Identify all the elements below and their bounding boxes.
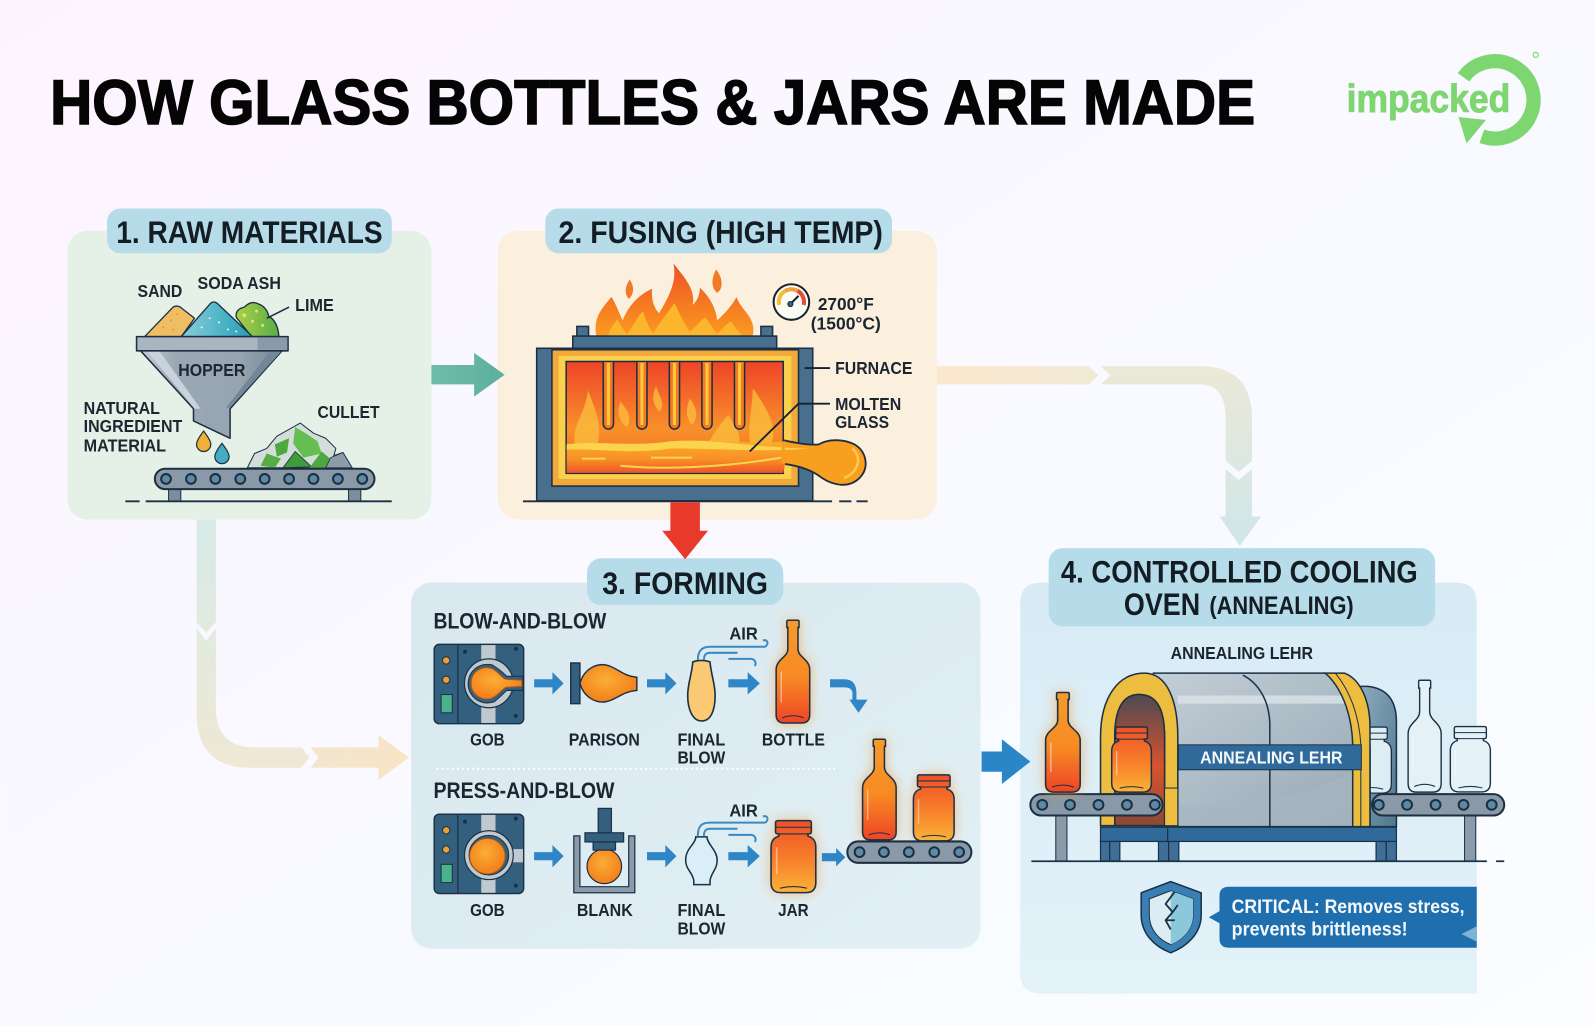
- labels: (1500°C): [811, 313, 881, 333]
- ground line: [523, 500, 868, 502]
- icon: blank press: [574, 808, 635, 893]
- arrow: fusing to forming: [662, 502, 708, 559]
- arrow: forming to cooling: [982, 739, 1030, 784]
- electrodes: [603, 362, 745, 429]
- icon: parison: [571, 663, 637, 704]
- heading: controlled cooling oven: [1061, 554, 1418, 622]
- clear jar behind lehr: [1351, 727, 1391, 793]
- callout: critical: [1209, 887, 1477, 948]
- leaders: [750, 368, 830, 451]
- conveyor left: [1030, 788, 1178, 861]
- icon: gob mould 2: [434, 814, 524, 894]
- small arrows row 2: [534, 845, 845, 867]
- labels: INGREDIENT: [84, 416, 182, 436]
- subheading: press-and-blow: PRESS-AND-BLOW: [433, 778, 615, 803]
- cullet pile: [247, 423, 352, 468]
- hot jar: [1112, 727, 1151, 792]
- row 1 labels: BLOW: [678, 748, 725, 768]
- panel: 3. forming: [411, 558, 981, 949]
- icon: hot bottle: [776, 620, 810, 723]
- band: annealing lehr sign: [1178, 745, 1361, 770]
- furnace inner flames: [574, 386, 773, 447]
- row 2 labels: AIR: [729, 801, 758, 821]
- panel: 1. raw materials: [67, 208, 431, 520]
- lehr legs and base: [1101, 827, 1396, 861]
- row 1 labels: BOTTLE: [762, 729, 825, 749]
- heading: raw materials: 1. RAW MATERIALS: [116, 214, 383, 250]
- label: annealing lehr: ANNEALING LEHR: [1171, 643, 1313, 663]
- furnace: [537, 326, 813, 501]
- icon: hot jar: [771, 821, 816, 893]
- row 2 labels: BLOW: [678, 918, 725, 938]
- row 2 labels: JAR: [778, 900, 809, 920]
- row 1 labels: GOB: [470, 729, 505, 749]
- labels: MATERIAL: [84, 435, 166, 455]
- icon: final blow preform: [688, 640, 767, 721]
- icon: falling drops: [197, 431, 229, 464]
- cooled clear jar: [1450, 727, 1490, 792]
- material piles: [145, 302, 279, 337]
- labels: SAND: [138, 281, 182, 301]
- labels: [811, 294, 913, 432]
- icon: gob mould 1: [434, 644, 524, 724]
- row 1 labels: [470, 624, 825, 768]
- hopper: [137, 337, 288, 438]
- heading: fusing: 2. FUSING (HIGH TEMP): [559, 214, 883, 250]
- lehr back section: [1360, 686, 1396, 827]
- row 2 labels: BLANK: [577, 900, 633, 920]
- band: annealing lehr sign: ANNEALING LEHR: [1200, 748, 1343, 768]
- row 2 labels: GOB: [470, 900, 505, 920]
- subheading: blow-and-blow: BLOW-AND-BLOW: [433, 608, 607, 633]
- row 1 labels: AIR: [729, 624, 758, 644]
- labels: NATURAL: [84, 398, 160, 418]
- arrow: fusing to cooling oven: [931, 366, 1261, 546]
- molten glass: [567, 440, 866, 485]
- labels: SODA ASH: [198, 273, 281, 293]
- cooled clear bottle: [1408, 680, 1441, 792]
- panel: 4. controlled cooling oven: [1020, 548, 1504, 993]
- title: HOW GLASS BOTTLES & JARS ARE MADE: [50, 68, 1255, 138]
- icon: shield with crack: [1141, 882, 1201, 953]
- hot bottle: [1046, 692, 1080, 792]
- logo: impacked: impacked: [1347, 78, 1510, 121]
- labels: MOLTEN: [835, 394, 901, 414]
- row 2 labels: FINAL: [678, 900, 725, 920]
- lime leader: [267, 307, 289, 318]
- heading: controlled cooling oven: (ANNEALING): [1209, 592, 1354, 620]
- heading: forming: 3. FORMING: [602, 565, 768, 601]
- labels: LIME: [295, 295, 334, 315]
- panel: 2. fusing: [498, 208, 937, 520]
- labels: GLASS: [835, 412, 889, 432]
- heading: controlled cooling oven: OVEN: [1124, 586, 1200, 622]
- heading: controlled cooling oven: 4. CONTROLLED COOLING: [1061, 554, 1418, 590]
- conveyor: [125, 469, 392, 501]
- icon: temperature gauge: [774, 284, 809, 320]
- callout: critical: CRITICAL: Removes stress,: [1232, 897, 1465, 918]
- labels: HOPPER: [178, 360, 245, 380]
- callout: critical: prevents brittleness!: [1232, 920, 1408, 941]
- icon: final blow bulb: [686, 816, 767, 885]
- lehr body: [1101, 673, 1370, 827]
- conveyor with hot bottle and jar: [847, 739, 971, 863]
- conveyor right: [1372, 794, 1504, 861]
- arrow: raw materials to fusing: [431, 353, 505, 397]
- labels: FURNACE: [835, 358, 913, 378]
- logo: impacked: [1347, 52, 1538, 143]
- row 1 labels: FINAL: [678, 729, 725, 749]
- labels: [84, 273, 380, 455]
- ground line: [1031, 860, 1504, 862]
- labels: CULLET: [318, 402, 380, 422]
- row 2 labels: [470, 801, 809, 938]
- labels: 2700°F: [818, 294, 874, 314]
- small arrows row 1: [534, 672, 868, 713]
- flames: [596, 263, 753, 336]
- row 1 labels: PARISON: [569, 729, 640, 749]
- arrow: raw materials to forming: [197, 514, 409, 780]
